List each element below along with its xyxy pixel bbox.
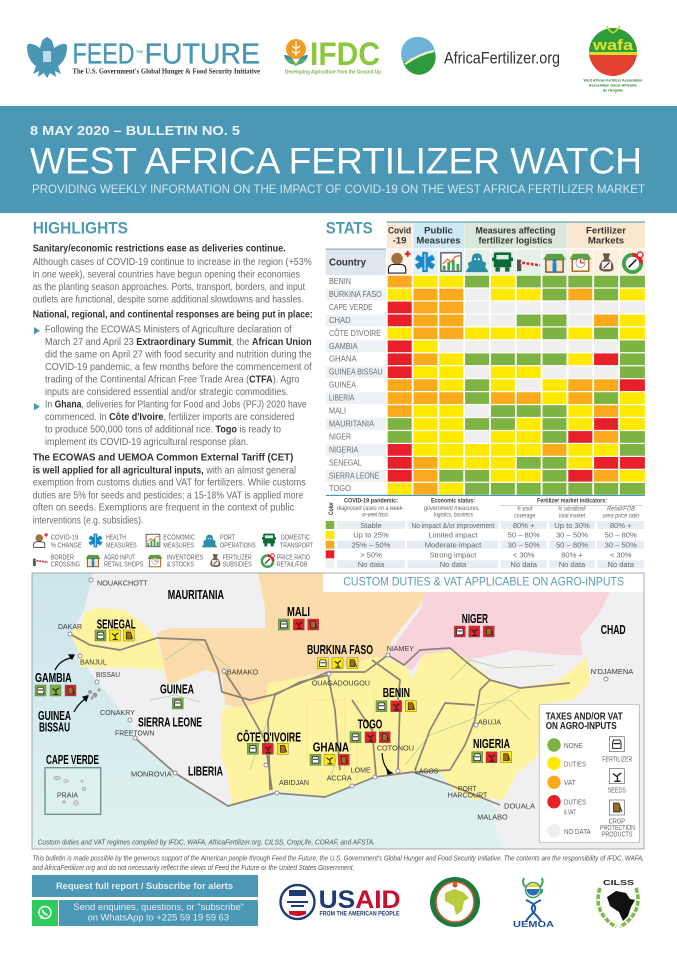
map legend: taxes and VAT: TAXES AND/OR VAT [546, 711, 623, 722]
map legend: taxes and VAT: PROTECTION [600, 823, 635, 832]
color key legend: COVID-19 pandemic: [344, 498, 398, 505]
country labels: CHAD [601, 622, 626, 637]
icon legend: HEALTH [106, 534, 126, 541]
country names: GUINEA BISSAU [329, 367, 383, 377]
country labels: TOGO [358, 717, 382, 732]
heading: stats: STATS [326, 219, 373, 237]
button: WhatsApp contact: on WhatsApp to +225 59 19 59 63 [88, 912, 229, 924]
map title [323, 573, 644, 592]
map legend: taxes and VAT: VAT [564, 778, 576, 787]
logo: Feed the Future: FEED [72, 38, 134, 70]
footer disclaimer [32, 854, 644, 872]
logo: WAFA: Association Ouest-Africaine [589, 84, 637, 88]
country names: GAMBIA [329, 341, 358, 351]
country labels: MAURITANIA [168, 587, 224, 602]
text block: responses: implement its COVID-19 agricultural response plan. [45, 437, 248, 448]
logo: USAID: USAID [319, 886, 401, 914]
text block: responses: In Ghana, deliveries for Planting for Food and Jobs (PFJ) 2020 have [45, 399, 307, 410]
text block: common external tariff: often on seeds. Exemptions are frequent in the context of public [33, 503, 294, 514]
map legend: taxes and VAT: ON AGRO-INPUTS [546, 721, 617, 732]
heat map grid [388, 276, 645, 495]
logo: USAID: FROM THE AMERICAN PEOPLE [320, 912, 400, 918]
logo: CILSS [598, 880, 638, 927]
country names: NIGER [329, 431, 351, 441]
color key legend: No data [358, 560, 385, 569]
map legend: taxes and VAT: PRODUCTS [602, 830, 632, 839]
city labels: DOUALA [504, 801, 535, 810]
logo: CILSS: CILSS [603, 880, 634, 887]
country column header [326, 249, 386, 275]
city labels: DAKAR [58, 622, 82, 631]
icon legend: PRICE RATIO [277, 554, 310, 561]
text block: responses: trading of the Continental African Free Trade Area (CTFA). Agro [45, 375, 300, 386]
map legend: taxes and VAT: FERTILIZER [602, 755, 632, 764]
country labels: GUINEA [38, 708, 71, 723]
text block: restrictions ease: as the planting season approaches. Ports, transport, borders, and input [33, 282, 305, 293]
color key legend: Up to 30% [554, 521, 590, 530]
icon: US eagle seal [27, 37, 67, 78]
city labels: NIAMEY [387, 644, 414, 653]
country labels: LIBERIA [188, 764, 223, 779]
icon legend: COVID-19 [51, 534, 78, 541]
color key legend: 30 – 50% [556, 531, 588, 540]
icon legend: MEASURES [163, 542, 194, 549]
text block: responses: March 27 and April 23 Extraordinary Summit, the African Union [45, 337, 312, 348]
column group headers: Public [424, 225, 454, 236]
color key legend: government measures, [424, 506, 480, 512]
button: WhatsApp contact: Send enquiries, questions, or "subscribe" [73, 902, 244, 913]
icon legend: DOMESTIC [281, 534, 310, 541]
country labels: SENEGAL [97, 616, 136, 631]
map legend: taxes and VAT: NONE [564, 741, 583, 750]
city labels: BISSAU [96, 670, 120, 679]
logo: WAFA: wafa [592, 37, 634, 54]
text block: restrictions ease: Sanitary/economic restrictions ease as deliveries continue. [33, 244, 286, 255]
text block: common external tariff [33, 453, 306, 526]
color key legend: % subsidized/ [558, 507, 587, 513]
icon legend: RETAIL/FOB [277, 562, 308, 569]
title banner [0, 106, 677, 213]
map title: CUSTOM DUTIES & VAT APPLICABLE ON AGRO-INPUTS [343, 574, 624, 588]
city labels: PORT [458, 784, 477, 793]
column group headers: Fertilizer [586, 225, 626, 236]
color key legend: 80% + [513, 521, 535, 530]
text block: responses: National, regional, and continental responses are being put in place: [33, 310, 313, 321]
country names: LIBERIA [329, 393, 355, 403]
column group headers: Covid [388, 225, 411, 236]
icon legend: ECONOMIC [163, 534, 195, 541]
color key legend: coverage [514, 513, 536, 519]
color key legend: < 30% [610, 550, 632, 559]
color key legend: total market [559, 513, 585, 519]
icon legend [33, 533, 314, 569]
color key legend: Stable [360, 521, 382, 530]
country labels: GHANA [313, 740, 349, 755]
country labels: SIERRA LEONE [138, 715, 202, 730]
city labels: LAGOS [415, 766, 438, 775]
city labels: COTONOU [377, 743, 414, 752]
logo: Feed the Future: THE [136, 49, 143, 54]
country labels [35, 587, 626, 779]
text block: common external tariff: exemption from customs duties and VAT for fertilizers. While customs [33, 478, 306, 489]
country names: TOGO [329, 483, 351, 493]
text block: responses: to produce 500,000 tons of additional rice. Togo is ready to [45, 425, 281, 436]
color key legend: on-week basis [362, 513, 388, 519]
country names: BURKINA FASO [329, 289, 382, 299]
color key legend: Strong impact [430, 550, 477, 559]
text block: restrictions ease: in one week), several countries have begun opening their economies [33, 270, 300, 281]
city labels: MALABO [477, 812, 508, 821]
map: yellow coastal countries [222, 650, 590, 805]
color key legend: No impact &/or improvement [412, 521, 495, 530]
country column header: Country [329, 257, 366, 269]
color key legend: < 30% [513, 550, 535, 559]
bulletin date: 8 MAY 2020 – BULLETIN NO. 5 [30, 124, 240, 138]
color key legend: diagnosed cases on a week- [337, 506, 404, 512]
logo: ECOWAS [430, 877, 480, 927]
icon legend: % CHANGE [51, 542, 82, 549]
color key legend: Color [328, 502, 335, 515]
logo: IFDC [284, 36, 381, 75]
text block: responses: Following the ECOWAS Ministers of Agriculture declaration of [45, 324, 292, 335]
map: Niger [387, 592, 610, 670]
icon legend: BORDER [51, 554, 74, 561]
country names: NIGERIA [329, 444, 359, 454]
country names [326, 276, 386, 493]
country names: CHAD [329, 315, 351, 325]
country names: CÔTE D'IVOIRE [329, 328, 381, 338]
country names: SENEGAL [329, 457, 362, 467]
country labels: GAMBIA [35, 670, 72, 685]
title: WEST AFRICA FERTILIZER WATCH [30, 139, 642, 181]
city labels: LOME [351, 766, 371, 775]
color key legend: 30 – 50% [508, 540, 540, 549]
map: sea [32, 573, 505, 849]
color key legend: Up to 25% [353, 531, 389, 540]
color key legend: Retail/FOB [607, 507, 635, 513]
subtitle: PROVIDING WEEKLY INFORMATION ON THE IMPACT OF COVID-19 ON THE WEST AFRICA FERTILIZER MARKET [32, 182, 645, 196]
logo: Feed the Future: The U.S. Government's Global Hunger & Food Security Initiative [72, 66, 261, 76]
footer disclaimer: and AfricaFertilizer.org and do not necessarily reflect the views of Feed the Future or the United States Government. [32, 863, 354, 872]
logo: AfricaFertilizer.org: AfricaFertilizer.org [444, 48, 560, 68]
text block: responses: COVID-19 pandemic, a few months before the commencement of [45, 362, 312, 373]
text block: responses [33, 310, 313, 448]
color key legend: No data [510, 560, 538, 569]
map caption: Custom duties and VAT regimes compiled by IFDC, WAFA, AfricaFertilizer.org, CILSS, CropLife, CORAF, and AFSTA. [38, 838, 375, 846]
map legend: taxes and VAT: SEEDS [608, 785, 626, 794]
country names: CAPE VERDE [329, 302, 373, 312]
color key legend: Economic status: [431, 498, 475, 505]
icon legend: INVENTORIES [167, 554, 204, 561]
city labels: N'DJAMENA [591, 667, 633, 676]
map legend: taxes and VAT: & VAT [564, 807, 576, 816]
text block: common external tariff: is well applied for all agricultural inputs, with an almost general [33, 465, 296, 476]
country labels: CÔTE D'IVOIRE [237, 730, 301, 745]
icon legend: PORT [220, 534, 236, 541]
panel: highlights [33, 219, 313, 526]
tax indicator icons by country [35, 619, 512, 765]
column group headers [387, 222, 645, 248]
country names: SIERRA LEONE [329, 470, 380, 480]
button: WhatsApp contact [32, 900, 258, 926]
icon legend: MEASURES [106, 542, 137, 549]
color key legend: No data [607, 560, 635, 569]
city labels: CONAKRY [100, 708, 135, 717]
city labels: BAMAKO [227, 668, 259, 677]
icon legend: AGRO INPUT [104, 554, 136, 561]
heading: highlights: HIGHLIGHTS [33, 219, 128, 237]
logo: UEMOA: UEMOA [513, 920, 554, 929]
icon legend: FERTILIZER [223, 554, 252, 561]
city labels: ABIDJAN [279, 778, 309, 787]
arrows to small countries [55, 655, 392, 774]
color key legend: % stock [517, 507, 533, 513]
color key legend: Moderate impact [425, 540, 482, 549]
map legend: taxes and VAT: DUTIES [564, 797, 586, 806]
logo: Feed the Future [27, 37, 261, 78]
column group headers: fertilizer logistics [478, 235, 552, 246]
map legend: taxes and VAT: NO DATA [564, 827, 591, 836]
inset: Cape Verde [45, 768, 101, 814]
column group headers: -19 [393, 235, 406, 246]
text block: restrictions ease: Although cases of COVID-19 continue to increase in the region (+53% [33, 257, 312, 268]
logo: IFDC: Developing Agriculture from the Ground Up [285, 69, 381, 75]
text block: common external tariff: duties are 5% for seeds and pesticides; a 15-18% VAT is applied more [33, 490, 304, 501]
country labels: GUINEA [160, 682, 194, 697]
column group headers: Markets [588, 235, 624, 246]
logo: USAID [280, 885, 401, 919]
icon legend: CROSSING [51, 562, 80, 569]
icon legend: SUBSIDIES [223, 562, 252, 569]
color key legend: Limited impact [429, 531, 478, 540]
color key legend: > 50% [360, 550, 382, 559]
inset: Cape Verde: PRAIA [57, 791, 78, 800]
country names: BENIN [329, 276, 351, 286]
map: rivers and minor roads [150, 640, 555, 780]
icon: WhatsApp [39, 906, 51, 919]
color key legend: 50 – 80% [508, 531, 540, 540]
text block: restrictions ease [33, 244, 312, 305]
country labels: BURKINA FASO [307, 642, 373, 657]
logo: IFDC: IFDC [310, 36, 380, 72]
logo: Feed the Future: FUTURE [145, 38, 260, 70]
map legend: taxes and VAT [539, 704, 639, 843]
city labels: BANJUL [80, 658, 107, 667]
color key legend: logistics, business [434, 513, 473, 519]
color key legend: 30 – 50% [605, 540, 637, 549]
text block: restrictions ease: outlets are functional, despite some additional slowdowns and hassles. [33, 294, 304, 305]
text block: responses: commenced. In Côte d'Ivoire, fertilizer imports are considered [45, 412, 295, 423]
country labels: BENIN [383, 685, 410, 700]
icon legend: OPERATIONS [220, 542, 256, 549]
color key legend: 80% + [561, 550, 583, 559]
icon legend: RETAIL SHOPS [104, 562, 144, 569]
color key legend: 50 – 80% [556, 540, 588, 549]
city labels: FREETOWN [115, 729, 154, 738]
country labels: CAPE VERDE [46, 752, 99, 767]
logo: WAFA [584, 26, 642, 92]
icon legend: TRANSPORT [280, 542, 314, 549]
map: Senegal [70, 608, 165, 670]
city labels: ACCRA [327, 774, 352, 783]
islands: Bissagos [86, 688, 100, 700]
map legend: taxes and VAT: CROP [609, 816, 625, 825]
map legend: taxes and VAT: DUTIES [564, 760, 586, 769]
column group headers: Measures affecting [476, 225, 556, 236]
country labels: BISSAU [39, 720, 70, 735]
text block: responses: did the same on April 27 with food security and nutrition during the [45, 349, 312, 360]
map: main roads [70, 634, 570, 806]
color key legend: 25% – 50% [352, 540, 391, 549]
color key legend: No data [440, 560, 467, 569]
icon legend: & STOCKS [167, 562, 194, 569]
country labels: MALI [287, 604, 310, 619]
panel: stats table [326, 219, 645, 569]
text block: responses: inputs are considered essential and/or strategic commodities. [45, 387, 288, 398]
map: Ghana and Togo borders [307, 690, 374, 782]
city labels: OUAGADOUGOU [312, 679, 370, 688]
map: Mali [157, 573, 430, 708]
country labels: NIGERIA [473, 736, 510, 751]
color key legend [326, 495, 645, 569]
country names: GHANA [329, 354, 357, 364]
country names: GUINEA [329, 380, 356, 390]
logo: WAFA: West African Fertilizer Association [584, 78, 642, 82]
city labels: ABUJA [478, 717, 501, 726]
text block: common external tariff: The ECOWAS and UEMOA Common External Tariff (CET) [33, 453, 293, 464]
button: request full report [32, 875, 258, 897]
color key legend: No data [559, 560, 586, 569]
color key legend: 80% + [610, 521, 632, 530]
city markers [68, 578, 608, 795]
country names: MAURITANIA [329, 418, 374, 428]
color key legend: urea price ratio [602, 513, 640, 519]
city labels [58, 578, 633, 821]
country names: MALI [329, 406, 346, 416]
column group headers: Measures [416, 235, 461, 246]
text block: common external tariff: interventions (e.g. subsidies). [33, 515, 143, 526]
button: request full report: Request full report / Subscribe for alerts [56, 881, 233, 892]
color key legend: 50 – 80% [605, 531, 637, 540]
city labels: HARCOURT [448, 790, 488, 799]
country labels: NIGER [462, 611, 488, 626]
color key legend: Fertilizer market indicators: [537, 498, 607, 505]
city labels: NOUAKCHOTT [97, 578, 148, 588]
indicator icons row [387, 250, 645, 275]
city labels: MONROVIA [131, 769, 172, 778]
logo: UEMOA [513, 878, 554, 929]
logo: WAFA: de l'Engrais [603, 88, 623, 92]
panel: customs duties and VAT map [32, 573, 644, 849]
logo: AfricaFertilizer.org [401, 37, 560, 75]
